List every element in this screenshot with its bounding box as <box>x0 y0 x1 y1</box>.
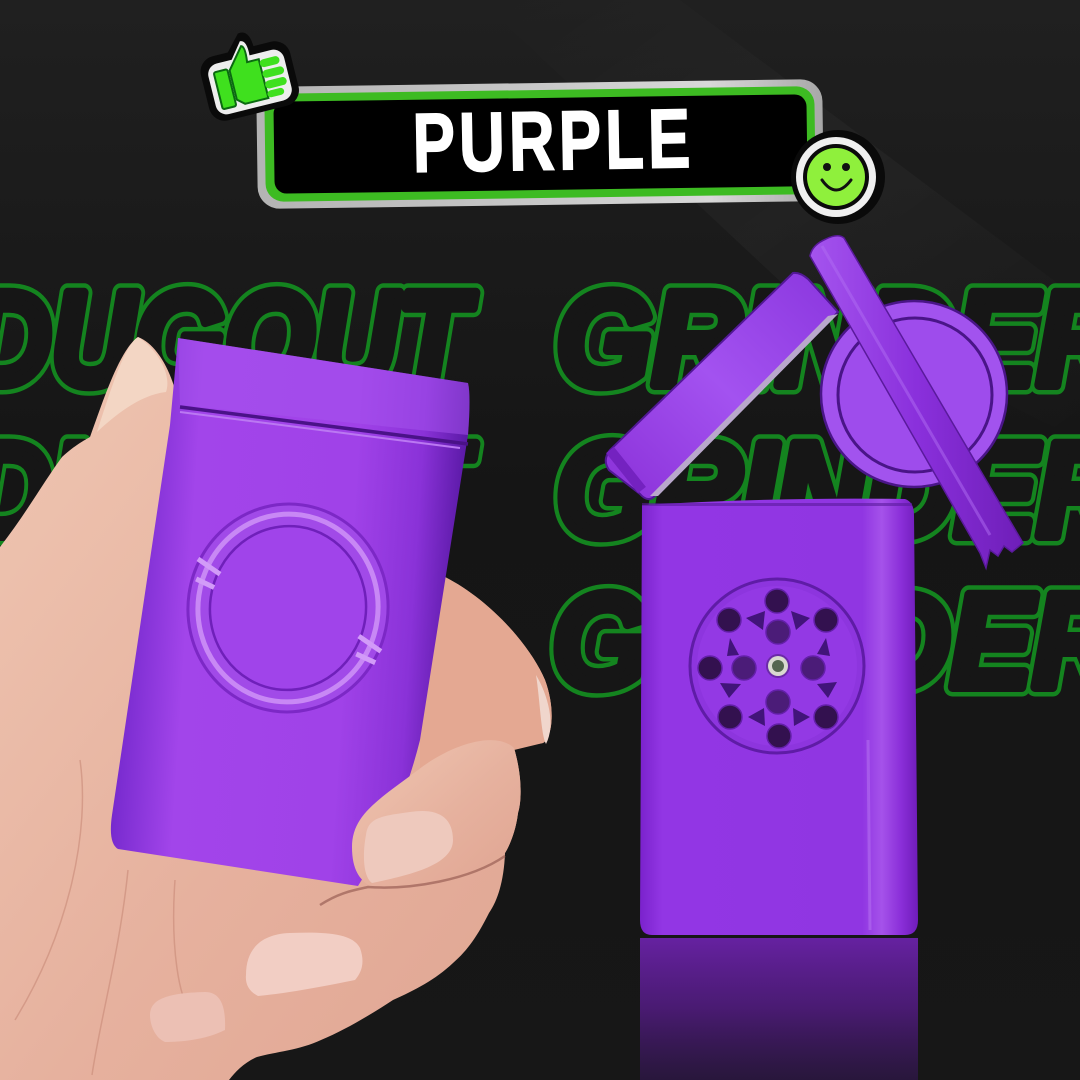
dugout seam <box>180 407 468 444</box>
hand: fingernail top <box>97 337 167 432</box>
icon: smiley <box>791 130 885 224</box>
opened grinder (right) <box>606 236 1023 1080</box>
badge frame <box>256 79 824 209</box>
background outlined words <box>0 265 1080 716</box>
icon: thumbs up <box>193 22 302 124</box>
grinder center pin <box>766 654 790 678</box>
disc lid <box>821 301 1007 487</box>
hand: palm creases <box>15 760 190 1075</box>
reflection <box>640 938 918 1080</box>
grinder highlight <box>868 740 870 930</box>
grinder teeth <box>720 611 837 726</box>
flip lid <box>606 273 838 499</box>
title badge <box>193 22 885 224</box>
fingernail: middle <box>364 811 453 883</box>
hand: middle finger <box>352 740 521 886</box>
hand holding dugout (left) <box>0 337 552 1080</box>
hand: finger gap shadow <box>320 856 505 905</box>
dugout body <box>111 338 469 886</box>
grinder body <box>640 499 918 935</box>
badge title: PURPLE: PURPLE <box>412 91 695 190</box>
fingernail: little <box>150 992 225 1042</box>
hand: shaded finger behind dugout <box>420 577 552 770</box>
hand: rear finger tip nail <box>536 675 551 744</box>
hand: overall silhouette <box>0 337 552 1080</box>
grinder holes <box>698 589 838 748</box>
dugout cap <box>178 338 470 435</box>
fingernail: ring <box>246 933 362 996</box>
grinder teeth disc <box>690 579 864 753</box>
dugout circular ring <box>174 491 402 725</box>
poker tube <box>810 236 1023 568</box>
